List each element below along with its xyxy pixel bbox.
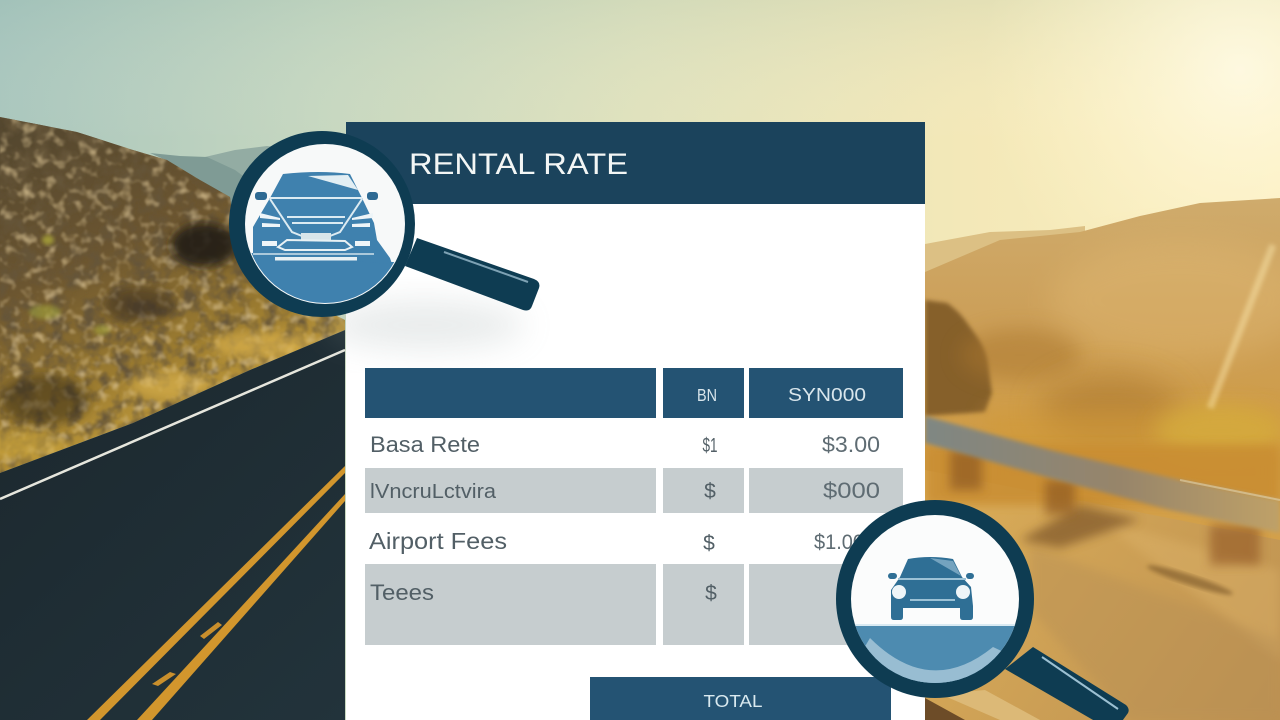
car illustration: [888, 557, 974, 620]
guard rail: [925, 416, 1280, 533]
table row: shaded line item: $000: [823, 478, 880, 503]
table row: taxes: $: [705, 582, 717, 605]
ground right: [925, 445, 1280, 720]
table row: airport fees: $: [703, 532, 715, 555]
road left: [0, 330, 345, 720]
icon: magnifier with car, bottom right: [836, 500, 1129, 720]
magnifier handle: [1005, 647, 1129, 720]
table row: base rate: $3.00: [822, 432, 880, 457]
table row: airport fees: $1.00: [814, 531, 864, 554]
table header row: SYN000: [788, 384, 866, 405]
card header bar: [346, 122, 925, 204]
total bar: TOTAL: [704, 691, 763, 711]
table row: taxes: [365, 564, 903, 645]
rate card panel: [346, 122, 925, 720]
ground base right: [925, 400, 1280, 720]
car illustration: [252, 172, 394, 303]
magnifier handle: [405, 238, 539, 310]
table row: shaded line item: $: [704, 480, 716, 503]
table row: taxes: Teees: [370, 580, 434, 605]
table row: base rate: [370, 432, 880, 457]
mountains right: [925, 198, 1280, 480]
tree line and brush right: [925, 245, 1280, 500]
title: RENTAL RATE: [409, 148, 628, 181]
distant mountains left: [150, 146, 300, 260]
table header row: BN: [697, 385, 717, 405]
lens water band: [851, 625, 1021, 685]
table row: base rate: $1: [702, 435, 718, 457]
table row: shaded line item: lVncruLctvira: [370, 481, 497, 503]
total bar: [590, 677, 891, 720]
table row: base rate: Basa Rete: [370, 432, 480, 457]
magnifier shadow: [325, 301, 525, 349]
table header row: [365, 368, 903, 418]
icon: magnifier with car, top left: [229, 131, 539, 317]
table row: airport fees: [369, 528, 864, 555]
hillside left: [0, 110, 350, 480]
table row: airport fees: Airport Fees: [369, 528, 507, 554]
table row: shaded line item: [365, 468, 903, 513]
